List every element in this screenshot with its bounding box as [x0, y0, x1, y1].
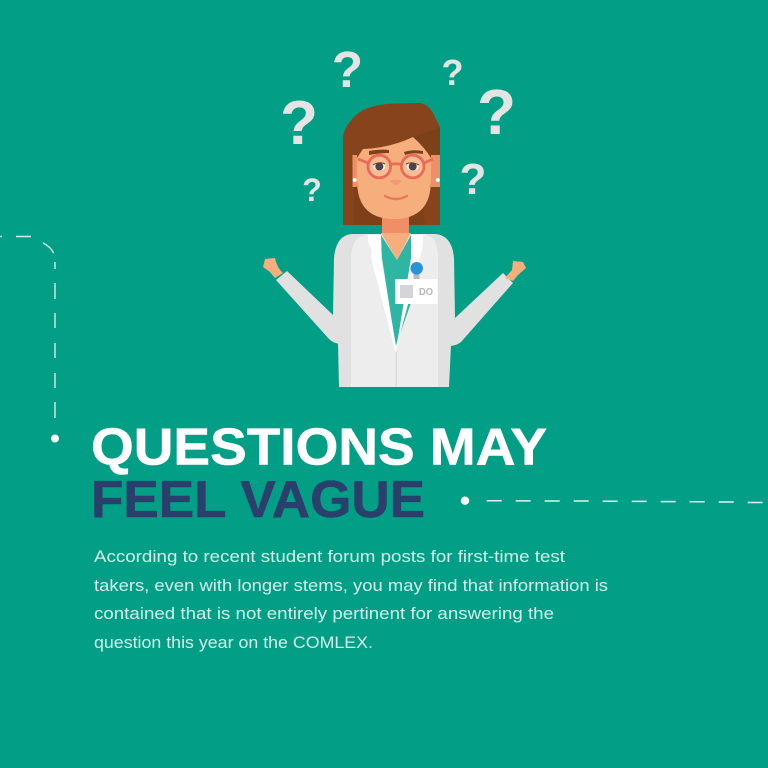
title: FEEL VAGUE — [91, 471, 425, 529]
question marks: ? — [280, 89, 318, 158]
earrings — [353, 178, 357, 182]
body text: contained that is not entirely pertinent for answering the — [94, 604, 554, 623]
arms of white coat — [276, 271, 513, 346]
question marks: ? — [302, 172, 322, 208]
eyes — [373, 162, 419, 171]
body text: According to recent student forum posts for first-time test — [94, 547, 565, 566]
dashed connector: left — [0, 236, 59, 442]
neck — [382, 215, 409, 237]
body text: question this year on the COMLEX. — [94, 633, 373, 652]
name badge: DO — [419, 287, 433, 298]
doctor illustration — [263, 103, 526, 387]
glasses — [358, 155, 433, 178]
eyebrows — [369, 150, 423, 155]
body text: takers, even with longer stems, you may find that information is — [94, 576, 608, 595]
question marks: ? — [332, 41, 363, 98]
name badge — [395, 279, 438, 304]
hair — [343, 103, 440, 225]
ears — [352, 155, 440, 187]
question marks: ? — [477, 76, 516, 148]
body text — [94, 547, 608, 652]
nose — [390, 180, 402, 185]
pin — [410, 262, 423, 280]
scrubs — [381, 235, 412, 348]
question marks: ? — [460, 155, 486, 204]
question marks: ? — [442, 52, 464, 93]
face — [357, 137, 431, 219]
dashed connector: right — [461, 496, 763, 505]
coat body — [333, 234, 455, 387]
question marks — [280, 41, 516, 208]
mouth — [385, 196, 407, 199]
v-neck skin — [381, 233, 411, 260]
collar — [368, 235, 423, 352]
title — [91, 418, 547, 529]
hands — [263, 258, 526, 281]
title: QUESTIONS MAY — [91, 418, 547, 476]
